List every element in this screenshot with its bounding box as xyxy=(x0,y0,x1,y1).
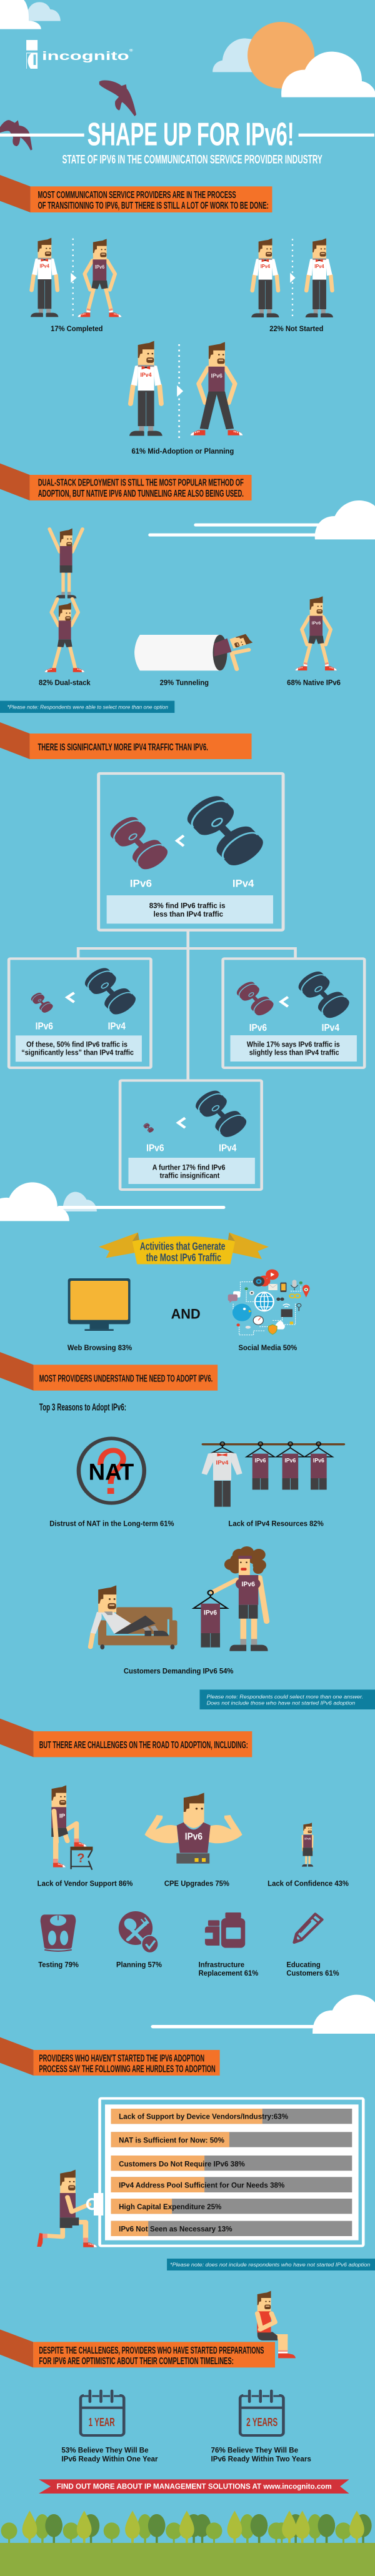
note: more than one answer xyxy=(200,1689,375,1709)
label confidence: Lack of Confidence 43% xyxy=(268,1879,349,1887)
bar: NAT xyxy=(111,2132,352,2147)
text: one year: IPv6 Ready Within One Year xyxy=(61,2454,158,2463)
logo: ® xyxy=(129,48,133,53)
light cloud behind sun xyxy=(212,38,256,72)
note: multiple options: *Please note: Respondents were able to select more than one option xyxy=(7,704,168,710)
label educating xyxy=(286,1960,339,1977)
icon: scale xyxy=(41,1914,76,1951)
label web browsing: Web Browsing 83% xyxy=(68,1343,132,1352)
label infrastructure: Replacement 61% xyxy=(199,1969,259,1977)
panel: adoption status xyxy=(31,238,333,455)
box: 17 percent slightly: IPv6 xyxy=(249,1023,267,1033)
icon: pencil xyxy=(294,1914,322,1943)
panel: challenges xyxy=(38,1785,349,1977)
cloud with speed line xyxy=(151,1995,375,2034)
box: 17 percent insignificant xyxy=(120,1080,262,1190)
figure: lack of confidence: IPv6 xyxy=(304,1838,311,1841)
label infrastructure: Infrastructure xyxy=(199,1960,244,1969)
figure: tunnel xyxy=(134,633,252,670)
panel: reasons to adopt xyxy=(0,1352,345,1528)
bird upper xyxy=(99,81,136,116)
footer ribbon: FIND OUT MORE ABOUT IP MANAGEMENT SOLUTIONS AT www.incognito.com xyxy=(57,2482,332,2490)
banner: optimistic xyxy=(0,2329,275,2367)
icon: bottles xyxy=(205,1912,245,1948)
text: two years xyxy=(211,2445,311,2463)
banner: hurdles xyxy=(0,2037,220,2076)
label infrastructure xyxy=(199,1960,259,1977)
text: one year xyxy=(61,2445,158,2463)
bar: capex: High Capital Expenditure 25% xyxy=(119,2202,222,2211)
figure: lack of confidence xyxy=(302,1823,313,1867)
icon: clothes rack: IPv6 xyxy=(255,1458,266,1464)
box: 50 percent: Of these, 50% find IPv6 traffic is xyxy=(26,1040,128,1048)
label 22%: 22% Not Started xyxy=(269,324,323,333)
label social media: Social Media 50% xyxy=(239,1343,298,1352)
label educating: Educating xyxy=(286,1960,321,1969)
banner: need to adopt: MOST PROVIDERS UNDERSTAND THE NEED TO ADOPT IPV6. xyxy=(39,1373,212,1384)
ribbon heading: the Most IPv6 Traffic xyxy=(146,1251,221,1264)
illustration: woman with hanger: IPv6 xyxy=(204,1609,217,1616)
label tunneling: 29% Tunneling xyxy=(160,679,209,687)
box: 50 percent: “significantly less” than IPv4 traffic xyxy=(21,1048,134,1057)
ribbon heading xyxy=(99,1233,269,1264)
light cloud top left xyxy=(21,2,61,21)
icon: NAT: NAT xyxy=(89,1460,134,1485)
label NAT: Distrust of NAT in the Long-term 61% xyxy=(49,1519,174,1528)
box: 83 percent: 83% find IPv6 traffic is xyxy=(149,901,225,910)
figure: native IPv6 xyxy=(295,596,337,670)
figure: vendor support: IP xyxy=(59,1813,65,1819)
bird left xyxy=(0,120,32,151)
figure: vendor support: ? xyxy=(77,1851,84,1865)
text: two years: IPv6 Ready Within Two Years xyxy=(211,2454,311,2463)
panel: optimism xyxy=(0,2259,375,2367)
icon: clothes rack: IPv6 xyxy=(284,1458,296,1464)
connectors xyxy=(77,931,297,1080)
box: 17 percent insignificant: traffic insignificant xyxy=(160,1171,220,1180)
panel: hurdles xyxy=(0,1995,375,2247)
AND: AND xyxy=(171,1307,201,1322)
icon: calendar two years xyxy=(240,2391,283,2435)
icon: clothes rack: IPv6 xyxy=(313,1458,324,1464)
bar: capex xyxy=(111,2199,352,2214)
banner: dual stack xyxy=(0,464,252,500)
icon: clothes rack xyxy=(202,1442,345,1507)
banner: need to adopt xyxy=(0,1352,218,1391)
label 61%: 61% Mid-Adoption or Planning xyxy=(131,447,234,455)
box: 17 percent slightly xyxy=(223,958,364,1068)
bar: NAT: NAT is Sufficient for Now: 50% xyxy=(119,2136,224,2144)
logo xyxy=(26,40,133,69)
box: 83 percent xyxy=(99,773,283,930)
subheading: Top 3 Reasons to Adopt IPv6: xyxy=(39,1402,126,1413)
bar: customers: Customers Do Not Require IPv6 38% xyxy=(119,2159,245,2168)
footer ribbon xyxy=(39,2479,349,2494)
banner: hurdles: PROVIDERS WHO HAVEN'T STARTED THE IPV6 ADOPTION xyxy=(39,2053,204,2064)
bar: not necessary: IPv6 Not Seen as Necessary 13% xyxy=(119,2225,232,2233)
text: two years: 76% Believe They Will Be xyxy=(211,2445,298,2454)
panel: customers demanding xyxy=(0,1546,375,1757)
17% completed figures xyxy=(31,238,121,317)
icon cluster: social media xyxy=(228,1270,310,1335)
label CPE: CPE Upgrades 75% xyxy=(164,1879,229,1887)
banner: challenges xyxy=(0,1719,252,1757)
bar: support xyxy=(111,2109,352,2124)
text: one year: 53% Believe They Will Be xyxy=(61,2445,149,2454)
banner: transition status xyxy=(0,175,272,212)
figure: person pulling the bar chart xyxy=(37,2170,103,2247)
bar: customers xyxy=(111,2156,352,2171)
label resources: Lack of IPv4 Resources 82% xyxy=(228,1519,324,1528)
bar chart: hurdles xyxy=(100,2099,363,2246)
banner: traffic: THERE IS SIGNIFICANTLY MORE IPV4 TRAFFIC THAN IPV6. xyxy=(38,742,208,753)
sun xyxy=(248,22,314,89)
box: 17 percent slightly: IPv4 xyxy=(322,1023,340,1033)
label customers demanding: Customers Demanding IPv6 54% xyxy=(124,1667,234,1675)
label vendor: Lack of Vendor Support 86% xyxy=(38,1879,133,1887)
banner: traffic xyxy=(0,722,252,759)
box: 50 percent: IPv4 xyxy=(108,1021,126,1032)
illustration: woman with hanger xyxy=(194,1546,268,1651)
label educating: Customers 61% xyxy=(286,1969,339,1977)
note: not started xyxy=(167,2259,375,2270)
bar: support: Lack of Support by Device Vendors/Industry:63% xyxy=(119,2112,289,2121)
label dual-stack: 82% Dual-stack xyxy=(39,679,91,687)
logo: incognito xyxy=(42,49,129,63)
61% mid-adoption figures xyxy=(129,341,242,440)
note: more than one answer: Does not include those who have not started IPv6 adoption xyxy=(207,1700,355,1706)
banner: hurdles: PROCESS SAY THE FOLLOWING ARE HURDLES TO ADOPTION xyxy=(39,2064,216,2074)
panel: activities xyxy=(0,1182,310,1352)
box: 17 percent insignificant: A further 17% find IPv6 xyxy=(152,1163,225,1171)
box: 17 percent slightly: slightly less than IPv4 traffic xyxy=(249,1048,339,1057)
illustration: man on sofa xyxy=(91,1585,178,1649)
white cloud top right xyxy=(281,52,375,97)
box: 17 percent insignificant: IPv6 xyxy=(146,1143,164,1153)
clouds with speed line xyxy=(0,1182,225,1221)
header xyxy=(0,0,375,212)
box: 50 percent xyxy=(9,958,151,1068)
box: 83 percent: less than IPv4 traffic xyxy=(154,910,223,918)
box: 83 percent: IPv4 xyxy=(232,877,254,889)
box: 17 percent insignificant: IPv4 xyxy=(219,1143,237,1153)
bar: address pool: IPv4 Address Pool Sufficient for Our Needs 38% xyxy=(119,2181,285,2189)
22% not started figures xyxy=(251,238,333,317)
icon: planning xyxy=(119,1911,158,1953)
label 17%: 17% Completed xyxy=(51,324,103,333)
label testing: Testing 79% xyxy=(38,1960,79,1969)
bar: address pool xyxy=(111,2177,352,2192)
bar: not necessary xyxy=(111,2221,352,2236)
note: multiple options xyxy=(0,701,174,713)
icon: clothes rack: IPv4 xyxy=(216,1460,229,1466)
label planning: Planning 57% xyxy=(116,1960,162,1969)
note: more than one answer: Please note: Respondents could select more than one answer. xyxy=(207,1694,363,1699)
figure: CPE upgrades: IPv6 xyxy=(185,1832,202,1842)
icon: calendar two years: 2 YEARS xyxy=(246,2416,278,2429)
icon: calendar one year xyxy=(81,2391,124,2435)
icon: monitor xyxy=(68,1278,131,1331)
figures: dual-stack acrobats xyxy=(45,529,84,672)
icon: calendar one year: 1 YEAR xyxy=(89,2416,115,2429)
box: 17 percent slightly: While 17% says IPv6 traffic is xyxy=(247,1040,340,1048)
box: 50 percent: IPv6 xyxy=(36,1021,53,1032)
box: 83 percent: IPv6 xyxy=(130,877,152,889)
panel: traffic comparison xyxy=(0,722,364,1190)
panel: timelines and footer xyxy=(0,2391,375,2576)
ground xyxy=(0,2543,375,2576)
illustration: woman with hanger: IPv6 xyxy=(241,1581,255,1588)
white cloud top left xyxy=(0,0,41,29)
ribbon heading: Activities that Generate xyxy=(140,1240,226,1253)
label native: 68% Native IPv6 xyxy=(287,679,341,687)
figure: vendor support xyxy=(51,1785,92,1870)
cloud with speed lines xyxy=(148,500,375,539)
figure: sitting man xyxy=(257,2291,296,2358)
panel: adoption methods xyxy=(0,464,375,713)
icon: NAT xyxy=(79,1438,144,1503)
trees xyxy=(1,2510,372,2544)
figure: CPE upgrades xyxy=(145,1793,242,1864)
